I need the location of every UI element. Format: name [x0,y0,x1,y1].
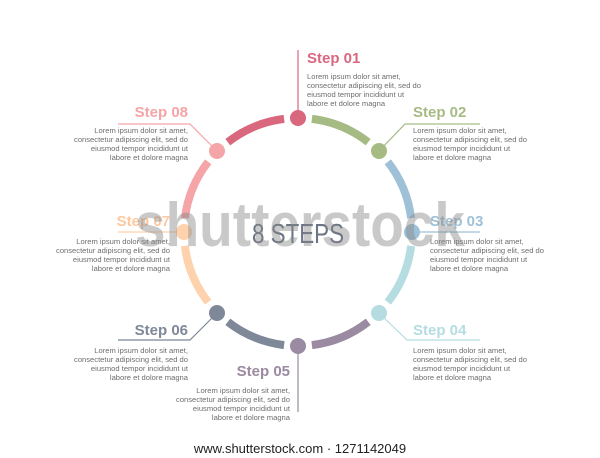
step 02: Lorem ipsum dolor sit amet, [413,126,507,135]
step 02: eiusmod tempor incididunt ut [413,144,511,153]
step 01: consectetur adipiscing elit, sed do [307,81,421,90]
step 01: Lorem ipsum dolor sit amet, [307,72,401,81]
step 02: consectetur adipiscing elit, sed do [413,135,527,144]
step 06: Lorem ipsum dolor sit amet, [94,346,188,355]
step 01 [307,50,421,108]
step 05: consectetur adipiscing elit, sed do [176,395,290,404]
step 08: consectetur adipiscing elit, sed do [74,135,188,144]
step 06: consectetur adipiscing elit, sed do [74,355,188,364]
step 06: eiusmod tempor incididunt ut [91,364,189,373]
step 03: labore et dolore magna [430,264,509,273]
step 03: Lorem ipsum dolor sit amet, [430,237,524,246]
step 07: consectetur adipiscing elit, sed do [56,246,170,255]
step 07: Lorem ipsum dolor sit amet, [76,237,170,246]
step 05: Lorem ipsum dolor sit amet, [196,386,290,395]
step 08 [74,104,189,162]
step 04: eiusmod tempor incididunt ut [413,364,511,373]
step 06: labore et dolore magna [110,373,189,382]
step 03: eiusmod tempor incididunt ut [430,255,528,264]
step 03: consectetur adipiscing elit, sed do [430,246,544,255]
center title: 8 STEPS [252,218,344,249]
step 05: eiusmod tempor incididunt ut [193,404,291,413]
step 04: Lorem ipsum dolor sit amet, [413,346,507,355]
watermark: shutterstock [135,191,465,260]
step 06 [74,322,189,382]
step 02: Step 02 [413,104,466,121]
step 08: Step 08 [135,104,188,121]
step 06: Step 06 [135,322,188,339]
connector lines [118,50,480,412]
step 04: Step 04 [413,322,467,339]
step 07 [56,213,171,273]
step 05: Step 05 [237,363,290,380]
step 04: consectetur adipiscing elit, sed do [413,355,527,364]
step 01: labore et dolore magna [307,99,386,108]
step 01: Step 01 [307,50,360,67]
ring arcs [185,119,411,345]
step 04 [413,322,527,382]
footer: www.shutterstock.com · 1271142049 [193,441,406,456]
step 03 [430,213,544,273]
step 07: labore et dolore magna [92,264,171,273]
step 08: labore et dolore magna [110,153,189,162]
step 07: Step 07 [117,213,170,230]
step 05 [176,363,291,422]
step 04: labore et dolore magna [413,373,492,382]
step 02 [413,104,527,162]
nodes [176,110,420,354]
step 08: eiusmod tempor incididunt ut [91,144,189,153]
step 05: labore et dolore magna [212,413,291,422]
step 07: eiusmod tempor incididunt ut [73,255,171,264]
step 02: labore et dolore magna [413,153,492,162]
step 08: Lorem ipsum dolor sit amet, [94,126,188,135]
step 01: eiusmod tempor incididunt ut [307,90,405,99]
step 03: Step 03 [430,213,483,230]
